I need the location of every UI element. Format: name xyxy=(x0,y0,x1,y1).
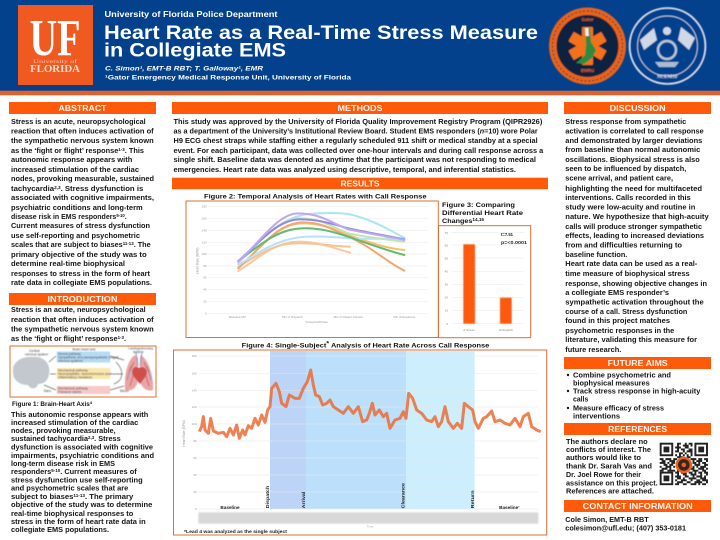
figure 2: line chart: 180 xyxy=(202,205,207,209)
figure 4: single-subject heart rate chart: 0 xyxy=(195,507,197,511)
statistics annotation: t=7.51 xyxy=(501,232,514,237)
figure 4: single-subject heart rate chart: 140 xyxy=(192,388,197,392)
figure 2: line chart: Min of Departure xyxy=(393,315,416,319)
figure 2: line chart: Heart Rate (BPM) xyxy=(195,247,199,274)
introduction text bottom: responders xyxy=(11,467,51,476)
discussion heading: DISCUSSION xyxy=(610,103,666,113)
discussion text: from and difficulties returning to xyxy=(565,240,683,250)
figure 2: line chart: 100 xyxy=(202,252,207,256)
discussion text: nature. We hypothesize that high-acuity xyxy=(565,212,710,221)
figure 2: line chart: 160 xyxy=(202,217,207,221)
contact heading: CONTACT INFORMATION xyxy=(583,501,693,511)
panel: methods xyxy=(172,102,548,174)
figure 3: bar chart: 30 xyxy=(445,282,448,286)
discussion text: oscillations. Biophysical stress is also xyxy=(565,155,700,164)
abstract text: autonomic response appears with xyxy=(11,155,132,164)
introduction text bottom: sustained tachycardia xyxy=(11,434,88,443)
figure 3 title: Figure 3: Comparing xyxy=(442,202,515,209)
abstract text: the sympathetic nervous system known xyxy=(11,136,154,145)
references text: References are attached. xyxy=(566,486,654,495)
methods text: H9 ECG chest straps while staffing either a regularly scheduled 911 shift or medical standby at a special xyxy=(174,136,538,145)
references text: The authors declare no xyxy=(566,437,648,446)
figure 1: brain-heart axis diagram: Mechanical pathway xyxy=(58,369,88,373)
references text: conflicts of interest. The xyxy=(566,445,651,454)
introduction text bottom: nodes, provoking measurable, xyxy=(11,426,116,435)
figure 4 title: Analysis of Heart Rate Across Call Response xyxy=(329,343,490,350)
abstract text: 5-10 xyxy=(116,213,125,218)
figure 1: brain-heart axis diagram: nervous system xyxy=(25,352,48,356)
UF logo: University of xyxy=(33,60,78,65)
abstract text: disease risk in EMS responders xyxy=(11,212,121,221)
future aims list: biophysical measures xyxy=(573,378,650,387)
abstract text: associated with cognitive impairments, xyxy=(11,193,154,202)
figure 3: bar chart: 0 xyxy=(446,322,448,326)
contact details xyxy=(565,515,686,532)
figure 3: bar chart: 70 xyxy=(445,231,448,235)
figure 3: bar chart: Δ Stress xyxy=(463,328,475,332)
department name: University of Florida Police Department xyxy=(104,9,278,19)
references text: assistance on this project. xyxy=(566,478,658,487)
figure 4: single-subject heart rate chart: 80 xyxy=(193,439,197,443)
discussion text: interventions. Calls recorded in this xyxy=(565,193,691,202)
abstract text: scales that are subject to biases xyxy=(11,240,123,249)
introduction text top: reaction that often induces activation of xyxy=(11,315,154,324)
phase labels: Return xyxy=(470,490,475,508)
panel: discussion xyxy=(564,102,711,354)
discussion text: baseline function. xyxy=(565,250,627,259)
introduction text top: Stress is an acute, neuropsychological xyxy=(11,305,146,314)
future aims list xyxy=(567,370,701,420)
introduction text bottom: and psychometric scales that are xyxy=(11,484,128,492)
figure 1: brain-heart axis diagram: Neuropeptides, neurohormones and xyxy=(58,372,111,376)
icon: NCEMSF seal xyxy=(630,8,706,84)
figure 1: brain-heart axis diagram: Blood xyxy=(120,389,129,393)
methods text: event. For each participant, data was collected over one-hour intervals and during call response across a xyxy=(174,146,544,155)
contact details: Cole Simon, EMT-B RBT xyxy=(565,515,649,524)
abstract text: . xyxy=(125,212,127,221)
icon: Gator EMRU seal: Gator xyxy=(581,17,594,22)
discussion text: Heart rate data can be used as a real- xyxy=(565,259,698,268)
introduction heading xyxy=(9,293,156,305)
icon: NCEMSF seal: NCEMSF xyxy=(657,75,678,80)
header banner xyxy=(0,0,720,95)
discussion text: a collegiate EMS responder’s xyxy=(565,288,669,297)
introduction text bottom: . The primary xyxy=(85,492,134,501)
figure 4 footnote: *Lead 4 was analyzed as the single subject xyxy=(184,529,288,534)
phase labels: Baseline’ xyxy=(499,505,520,510)
figure 4: single-subject heart rate chart: 40 xyxy=(193,473,197,477)
abstract text: Stress is an acute, neuropsychological xyxy=(11,117,146,126)
phase labels: Baseline xyxy=(220,505,240,510)
figure 4 title: * xyxy=(326,341,330,348)
poster title: Heart Rate as a Real-Time Stress Measure xyxy=(104,22,538,44)
methods text: single shift. Baseline data was denoted as anytime that the participant was not responding to medical xyxy=(174,155,536,164)
discussion heading xyxy=(564,102,711,114)
discussion text: course of a call. Stress dysfunction xyxy=(565,307,687,316)
methods text: as a department of the University’s Institutional Review Board. Student EMS responders (n=10) wore Polar xyxy=(174,126,538,136)
panel: results xyxy=(172,178,548,535)
future aims list: Measure efficacy of stress xyxy=(573,403,664,412)
methods heading: METHODS xyxy=(338,103,383,113)
abstract text: use self-reporting and psychometric xyxy=(11,231,140,240)
figure 1: brain-heart axis diagram: system xyxy=(133,350,144,354)
figure 1: brain-heart axis diagram: inflammatory mediators xyxy=(58,375,93,379)
figure 1: brain-heart axis diagram: Sympathetic and parasympathetic (vagal) xyxy=(58,356,119,360)
figure 2: line chart: 40 xyxy=(203,288,207,292)
abstract text: as the ‘fight or flight’ response xyxy=(11,146,117,155)
discussion text: time measure of biophysical stress xyxy=(565,269,690,278)
introduction text bottom: . Stress xyxy=(94,434,121,443)
discussion text: and demonstrated by larger deviations xyxy=(565,136,702,145)
abstract text: reaction that often induces activation of xyxy=(11,126,154,136)
discussion text xyxy=(565,117,710,354)
figure 2 title: Figure 2: Temporal Analysis of Heart Rates with Call Response xyxy=(204,193,427,200)
figure 4: single-subject heart rate chart: 20 xyxy=(193,490,197,494)
figure 3: bar chart: Δ Dispatch xyxy=(499,328,514,332)
abstract text xyxy=(11,117,154,287)
UF logo xyxy=(18,5,93,85)
chart legend xyxy=(203,328,423,334)
introduction text bottom: increased stimulation of the cardiac xyxy=(11,418,138,427)
UF logo: FLORIDA xyxy=(30,64,81,75)
contact details: colesimon@ufl.edu; (407) 353-0181 xyxy=(565,523,686,532)
phase labels: Dispatch xyxy=(265,485,270,508)
figure 2: line chart: Timepoint/Phase xyxy=(306,320,328,324)
abstract text: psychiatric conditions and long-term xyxy=(11,203,143,212)
discussion text: effects, leading to increased deviations xyxy=(565,231,704,240)
introduction text top: . xyxy=(124,334,126,343)
discussion text: sympathetic activation throughout the xyxy=(565,298,704,306)
icon: Gator EMRU seal: EMRU xyxy=(581,68,594,73)
figure 2: line chart: Min of Patient Contact xyxy=(334,315,363,319)
discussion text: from baseline than normal autonomic xyxy=(565,145,700,154)
discussion text: future research. xyxy=(565,345,621,354)
methods text xyxy=(174,117,544,174)
phase labels: Clearance xyxy=(401,483,406,508)
introduction text top: the sympathetic nervous system known xyxy=(11,324,154,334)
introduction text top: 1-3 xyxy=(118,335,125,340)
results heading xyxy=(172,178,548,189)
figure 4: single-subject heart rate chart: 160 xyxy=(192,371,197,375)
introduction text bottom: dysfunction is associated with cognitive xyxy=(11,442,153,452)
phase labels: Arrival xyxy=(301,492,306,508)
introduction text bottom: This autonomic response appears with xyxy=(11,410,148,419)
references text xyxy=(566,437,658,495)
phase labels xyxy=(220,483,520,510)
introduction text bottom: stress dysfunction use self-reporting xyxy=(11,476,143,484)
figure 2: line chart: 60 xyxy=(203,276,207,280)
panel: references xyxy=(564,423,711,495)
figure 1: brain-heart axis diagram xyxy=(10,346,156,397)
methods text: emergencies. Heart rate data was analyzed using descriptive, temporal, and inferential statistics. xyxy=(174,165,516,174)
discussion text: literature, validating this measure for xyxy=(565,335,697,344)
authors: C. Simon¹, EMT-B RBT; T. Galloway¹, EMR xyxy=(105,65,263,72)
figure 4: single-subject heart rate chart: 180 xyxy=(192,354,197,358)
UF logo: UF xyxy=(30,10,80,67)
discussion text: seen to be influenced by dispatch, xyxy=(565,164,686,173)
abstract text: 1-3 xyxy=(118,147,125,152)
bar: dispatch xyxy=(500,298,512,324)
methods text: This study was approved by the University of Florida Quality Improvement Registry Program (QIPR2926) xyxy=(174,117,543,126)
figure 3: bar chart xyxy=(438,226,531,338)
references heading xyxy=(564,423,711,435)
figure 1: brain-heart axis diagram: nervous systems xyxy=(58,359,83,363)
future aims list: Track stress response in high-acuity xyxy=(573,386,701,395)
figure 3: bar chart: 50 xyxy=(445,256,448,260)
references text: authors would like to xyxy=(566,453,642,462)
abstract text: increased stimulation of the cardiac xyxy=(11,165,139,174)
contact heading xyxy=(564,500,711,512)
figure 3: bar chart: 10 xyxy=(445,308,448,312)
introduction text bottom: 5-10 xyxy=(51,468,61,473)
figure 2: line chart: 120 xyxy=(202,240,207,244)
panel: abstract xyxy=(9,102,156,287)
poster title: in Collegiate EMS xyxy=(104,40,286,62)
introduction text bottom: stress in the form of heart rate data in xyxy=(11,517,146,526)
figure 1: brain-heart axis diagram: Pressure waves xyxy=(58,390,82,394)
abstract heading xyxy=(9,102,156,114)
abstract text: tachycardia xyxy=(11,184,52,193)
figure 4: single-subject heart rate chart: 120 xyxy=(192,405,197,409)
bar: stress xyxy=(463,244,475,324)
figure 4: single-subject heart rate chart: Time xyxy=(367,525,374,529)
call phase bands xyxy=(270,351,475,509)
methods heading xyxy=(172,102,548,114)
discussion text: study were low-acuity and routine in xyxy=(565,202,695,212)
figure 4: single-subject heart rate chart xyxy=(174,350,547,535)
future aims list: Combine psychometric and xyxy=(573,370,671,379)
figure 3 title: 14,15 xyxy=(472,217,485,222)
icon: Gator EMRU seal xyxy=(549,8,626,84)
future aims list: calls xyxy=(573,394,588,403)
introduction text top xyxy=(11,305,154,343)
discussion text: psychometric responses in the xyxy=(565,326,674,335)
affiliation: ¹Gator Emergency Medical Response Unit, University of Florida xyxy=(105,74,351,82)
results heading: RESULTS xyxy=(340,178,380,188)
abstract text: responses to stress in the form of heart xyxy=(11,269,151,278)
figure 3 title xyxy=(442,202,523,225)
abstract text: 2,3 xyxy=(54,185,61,190)
discussion text: response, showing objective changes in xyxy=(565,279,707,288)
discussion text: highlighting the need for multifaceted xyxy=(565,184,702,193)
introduction text bottom: 2,3 xyxy=(88,435,95,440)
figure 3: bar chart: 20 xyxy=(445,296,448,300)
references text: thank Dr. Sarah Vas and xyxy=(566,461,652,470)
future aims heading: FUTURE AIMS xyxy=(608,358,668,368)
introduction text bottom: impairments, psychiatric conditions and xyxy=(11,451,154,460)
discussion text: calls will produce stronger sympathetic xyxy=(565,222,702,231)
abstract text: determine real-time biophysical xyxy=(11,259,125,268)
abstract text: . The xyxy=(134,240,151,249)
panel: future aims xyxy=(564,357,711,420)
abstract text: . Stress dysfunction is xyxy=(61,184,143,193)
abstract text: rate data in collegiate EMS populations. xyxy=(11,278,152,287)
figure 3 title: Differential Heart Rate xyxy=(442,210,523,217)
figure 4 title: Figure 4: Single-Subject xyxy=(242,343,319,350)
abstract text: primary objective of the study was to xyxy=(11,250,147,259)
introduction text bottom xyxy=(11,410,154,534)
figure 2: line chart: 20 xyxy=(203,299,207,303)
figure 1: brain-heart axis diagram: Neural pathway xyxy=(58,352,81,356)
introduction text bottom: subject to biases xyxy=(11,492,70,501)
figure 4: single-subject heart rate chart: 100 xyxy=(192,422,197,426)
figure 1: brain-heart axis diagram: Cardiopulmonary xyxy=(128,346,153,350)
introduction heading: INTRODUCTION xyxy=(48,294,118,304)
figure 1 caption: Figure 1: Brain-Heart Axis xyxy=(12,401,88,408)
figure 2: line chart: 80 xyxy=(203,264,207,268)
figure 2: line chart: 140 xyxy=(202,228,207,232)
heart rate series xyxy=(199,370,541,438)
discussion text: found in this project matches xyxy=(565,316,670,325)
panel: contact information xyxy=(564,500,711,532)
icon: brain xyxy=(13,357,49,388)
introduction text bottom: collegiate EMS populations. xyxy=(11,525,109,534)
discussion text: activation is correlated to call response xyxy=(565,126,704,136)
future aims heading xyxy=(564,357,711,369)
introduction text top: as the ‘fight or flight’ response xyxy=(11,334,117,343)
figure 1: brain-heart axis diagram: Central xyxy=(29,349,40,353)
poster title xyxy=(104,22,538,62)
figure 2: line chart: 0 xyxy=(205,311,207,315)
figure 3: bar chart: 60 xyxy=(445,244,448,248)
introduction text bottom: objective of the study was to determine xyxy=(11,500,152,509)
introduction text bottom: . Current measures of xyxy=(60,467,137,476)
figure 4: single-subject heart rate chart: 60 xyxy=(193,456,197,460)
introduction text bottom: real-time biophysical responses to xyxy=(11,509,134,518)
discussion text: Stress response from sympathetic xyxy=(565,117,686,126)
figure 1 caption: 4 xyxy=(90,400,93,405)
statistics annotation xyxy=(501,232,528,245)
figure 1: brain-heart axis diagram: Mechanical pathway xyxy=(58,386,88,390)
introduction text bottom: long-term disease risk in EMS xyxy=(11,459,115,468)
figure 4: single-subject heart rate chart: Heart Rate (BPM) xyxy=(182,420,186,447)
icon: lungs and heart xyxy=(125,352,153,391)
references text: Dr. Joel Rowe for their xyxy=(566,470,641,479)
abstract text: Current measures of stress dysfunction xyxy=(11,221,150,230)
references heading: REFERENCES xyxy=(608,424,667,434)
icon: QR code xyxy=(660,443,708,486)
abstract heading: ABSTRACT xyxy=(58,103,107,113)
figure 2: line chart: Min of Dispatch xyxy=(282,315,303,319)
panel: introduction xyxy=(9,293,156,534)
statistics annotation: p=<0.0001 xyxy=(501,240,528,245)
discussion text: scene arrival, and patient care, xyxy=(565,174,673,182)
figure 1: brain-heart axis diagram: Brain-heart axis xyxy=(72,347,96,351)
time axis labels xyxy=(198,512,538,524)
abstract text: nodes, provoking measurable, sustained xyxy=(11,174,154,183)
figure 3 title: Changes xyxy=(442,218,471,225)
figure 2: line chart xyxy=(186,201,438,338)
abstract text: 11-13 xyxy=(123,241,134,246)
figure 2: line chart: Baseline HR xyxy=(229,315,246,319)
figure 3: bar chart: 40 xyxy=(445,270,448,274)
future aims list: interventions xyxy=(573,411,620,420)
figure 1: brain-heart axis diagram: Baro- xyxy=(44,389,52,393)
introduction text bottom: 11-13 xyxy=(73,493,86,498)
abstract text: . This xyxy=(125,146,144,155)
